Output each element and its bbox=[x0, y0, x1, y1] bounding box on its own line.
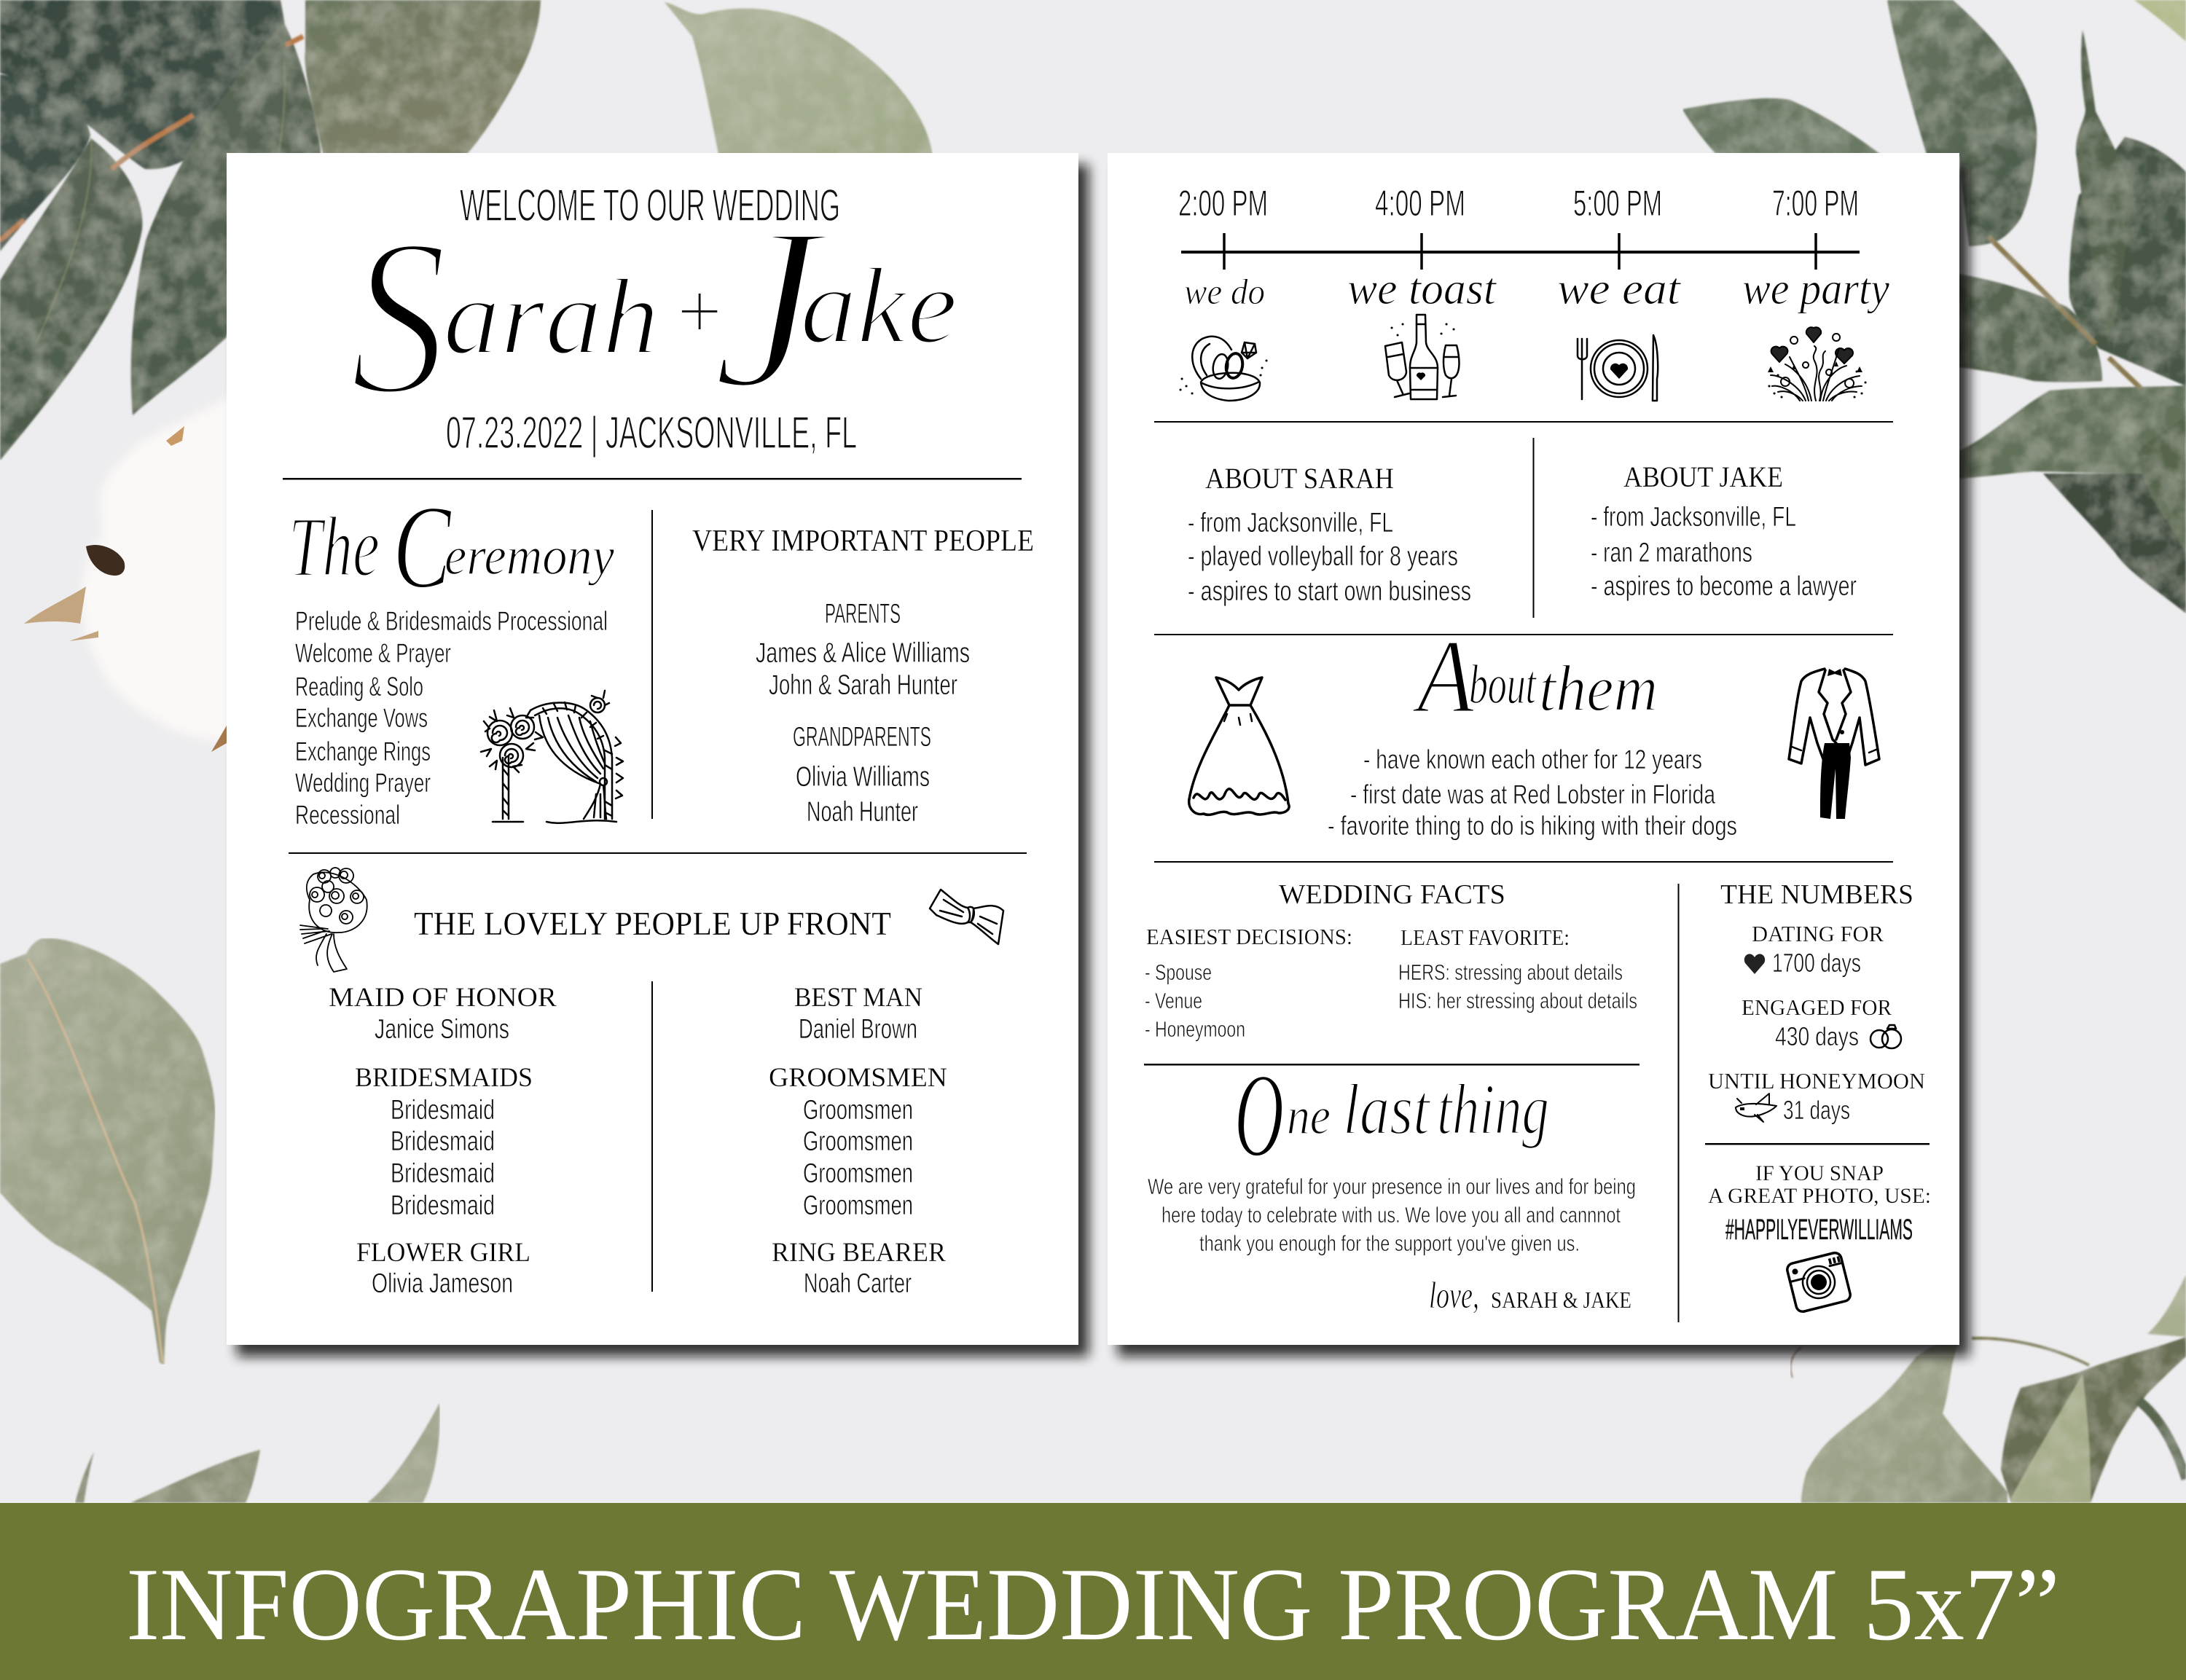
wedding party: groom side: GROOMSMEN bbox=[769, 1063, 947, 1093]
parents and grandparents list: John & Sarah Hunter bbox=[769, 670, 957, 701]
the numbers: THE NUMBERS bbox=[1720, 879, 1913, 910]
heading: about them: A bbox=[1412, 619, 1475, 735]
timeline: we do bbox=[1184, 271, 1265, 312]
about jake: - ran 2 marathons bbox=[1591, 538, 1752, 568]
heading: one last thing: thing bbox=[1437, 1069, 1549, 1150]
wedding facts: LEAST FAVORITE: bbox=[1400, 925, 1570, 950]
ceremony order list: Welcome & Prayer bbox=[295, 638, 451, 668]
heading: about them: them bbox=[1539, 653, 1658, 725]
wedding party: bride side: Olivia Jameson bbox=[372, 1268, 513, 1299]
wedding party: bride side: BRIDESMAIDS bbox=[355, 1063, 533, 1093]
heading: the ceremony: C bbox=[393, 480, 452, 613]
wedding party: bride side: Bridesmaid bbox=[391, 1158, 495, 1189]
title: couple names: + bbox=[676, 266, 723, 356]
title: couple names bbox=[350, 179, 957, 442]
photo hashtag prompt: IF YOU SNAP bbox=[1755, 1161, 1884, 1185]
the numbers: 430 days bbox=[1775, 1021, 1859, 1051]
wedding party: groom side: Noah Carter bbox=[804, 1268, 912, 1299]
wedding facts: HIS: her stressing about details bbox=[1398, 988, 1637, 1013]
heading: one last thing: O bbox=[1234, 1048, 1284, 1182]
icon: champagne and flutes bbox=[1385, 315, 1459, 399]
ceremony order list bbox=[295, 606, 608, 830]
the numbers: 31 days bbox=[1783, 1095, 1850, 1125]
ceremony order list: Wedding Prayer bbox=[295, 768, 431, 798]
title: couple names: S bbox=[350, 192, 447, 442]
wedding party: bride side: Janice Simons bbox=[375, 1014, 509, 1045]
signature: SARAH & JAKE bbox=[1491, 1287, 1631, 1313]
card shadows bbox=[237, 165, 1970, 1357]
thank you message: thank you enough for the support you've given us. bbox=[1199, 1230, 1580, 1256]
thank you message: We are very grateful for your presence in our lives and for being bbox=[1148, 1174, 1636, 1199]
about jake: ABOUT JAKE bbox=[1623, 460, 1783, 493]
wedding party: groom side: RING BEARER bbox=[772, 1238, 946, 1268]
eucalyptus leaves bottom bbox=[75, 1403, 440, 1503]
eucalyptus leaves top left bbox=[0, 0, 933, 460]
icon: ring box bbox=[1180, 337, 1266, 401]
ceremony order list: Recessional bbox=[295, 800, 400, 830]
wedding facts bbox=[1145, 879, 1637, 1042]
icon: small heart bbox=[1744, 954, 1765, 974]
about sarah: - from Jacksonville, FL bbox=[1188, 508, 1393, 538]
banner: product title: INFOGRAPHIC WEDDING PROGRAM 5x7” bbox=[126, 1547, 2060, 1662]
timeline: 2:00 PM bbox=[1178, 183, 1268, 224]
signature bbox=[1429, 1275, 1631, 1316]
thank you message bbox=[1148, 1174, 1636, 1256]
icon: small rings bbox=[1870, 1025, 1901, 1048]
timeline: 7:00 PM bbox=[1772, 183, 1859, 224]
eucalyptus leaves top right bbox=[1682, 0, 2186, 613]
thank you message: here today to celebrate with us. We love you all and cannnot bbox=[1161, 1202, 1621, 1228]
the numbers bbox=[1708, 879, 1925, 1125]
heading: about them: bout bbox=[1469, 654, 1537, 715]
the numbers: UNTIL HONEYMOON bbox=[1708, 1068, 1925, 1094]
photo hashtag prompt: #HAPPILYEVERWILLIAMS bbox=[1725, 1214, 1913, 1246]
heading: one last thing: ne bbox=[1287, 1087, 1331, 1145]
ceremony order list: Exchange Rings bbox=[295, 737, 431, 766]
eucalyptus leaves bottom right bbox=[1790, 1275, 2186, 1503]
about sarah: - aspires to start own business bbox=[1188, 576, 1471, 607]
heading: the ceremony: eremony bbox=[444, 527, 614, 586]
icon: camera bbox=[1786, 1252, 1852, 1313]
heading: the ceremony bbox=[289, 480, 614, 613]
about them facts: - have known each other for 12 years bbox=[1363, 745, 1702, 774]
divider: ceremony column bbox=[651, 510, 653, 819]
wedding party: groom side: Groomsmen bbox=[803, 1190, 913, 1221]
icon: floral wedding arch bbox=[481, 691, 623, 823]
heading: the lovely people up front: THE LOVELY PEOPLE UP FRONT bbox=[414, 906, 891, 942]
parents and grandparents list bbox=[756, 599, 970, 828]
icon: airplane bbox=[1736, 1094, 1776, 1122]
wedding party: groom side: BEST MAN bbox=[794, 983, 922, 1013]
signature: love, bbox=[1429, 1275, 1479, 1316]
ceremony order list: Reading & Solo bbox=[295, 672, 423, 702]
welcome line: WELCOME TO OUR WEDDING bbox=[460, 181, 840, 231]
panel: program back card bbox=[1108, 153, 1959, 1345]
wedding party: bride side: Bridesmaid bbox=[391, 1126, 495, 1157]
icon: tuxedo bbox=[1789, 669, 1879, 819]
about jake: - from Jacksonville, FL bbox=[1591, 502, 1796, 533]
the numbers: DATING FOR bbox=[1752, 921, 1884, 946]
timeline: we toast bbox=[1347, 264, 1497, 314]
photo hashtag prompt: A GREAT PHOTO, USE: bbox=[1708, 1184, 1931, 1208]
wedding party: bride side: FLOWER GIRL bbox=[356, 1238, 530, 1268]
wedding party: groom side bbox=[769, 983, 947, 1299]
timeline bbox=[1178, 183, 1889, 314]
timeline: we party bbox=[1742, 264, 1889, 314]
wedding facts: - Honeymoon bbox=[1145, 1016, 1245, 1042]
heading: about them bbox=[1412, 619, 1658, 735]
icon: bow tie bbox=[930, 890, 1003, 944]
about them facts bbox=[1328, 745, 1737, 841]
timeline: we eat bbox=[1557, 264, 1682, 314]
the numbers: ENGAGED FOR bbox=[1742, 994, 1892, 1020]
title: couple names: arah bbox=[443, 256, 659, 377]
wedding party: groom side: Groomsmen bbox=[803, 1095, 913, 1126]
wedding facts: - Spouse bbox=[1145, 959, 1212, 985]
cotton boll bbox=[24, 393, 237, 752]
about them facts: - favorite thing to do is hiking with their dogs bbox=[1328, 811, 1737, 841]
photo hashtag prompt bbox=[1708, 1161, 1931, 1246]
heading: the ceremony: The bbox=[289, 499, 380, 594]
wedding party: bride side: Bridesmaid bbox=[391, 1095, 495, 1126]
wedding party: bride side: MAID OF HONOR bbox=[329, 983, 557, 1013]
icon: bouquet bbox=[300, 868, 367, 972]
title: couple names: J bbox=[712, 179, 831, 437]
wedding facts: WEDDING FACTS bbox=[1279, 879, 1505, 910]
timeline: 5:00 PM bbox=[1573, 183, 1662, 224]
parents and grandparents list: PARENTS bbox=[825, 599, 901, 629]
panel: program front card bbox=[227, 153, 1078, 1345]
wedding facts: HERS: stressing about details bbox=[1398, 959, 1623, 985]
about sarah: - played volleyball for 8 years bbox=[1188, 541, 1458, 572]
parents and grandparents list: Olivia Williams bbox=[796, 761, 930, 793]
the numbers: 1700 days bbox=[1772, 948, 1861, 978]
wedding facts: - Venue bbox=[1145, 988, 1202, 1013]
about sarah bbox=[1188, 462, 1471, 607]
about sarah: ABOUT SARAH bbox=[1205, 462, 1394, 495]
wedding party: groom side: Daniel Brown bbox=[799, 1014, 917, 1045]
icon: plate and cutlery bbox=[1578, 335, 1658, 401]
wedding party: bride side bbox=[329, 983, 557, 1299]
banner: product title bbox=[0, 1503, 2186, 1680]
icon: fireworks and hearts bbox=[1768, 327, 1865, 401]
ceremony order list: Exchange Vows bbox=[295, 703, 428, 733]
wedding party: groom side: Groomsmen bbox=[803, 1158, 913, 1189]
about jake: - aspires to become a lawyer bbox=[1591, 571, 1857, 602]
date and location: 07.23.2022 | JACKSONVILLE, FL bbox=[446, 408, 857, 458]
wedding party: bride side: Bridesmaid bbox=[391, 1190, 495, 1221]
title: couple names: ake bbox=[800, 246, 957, 366]
wedding facts: EASIEST DECISIONS: bbox=[1146, 924, 1352, 949]
heading: very important people: VERY IMPORTANT PEOPLE bbox=[692, 525, 1034, 558]
parents and grandparents list: James & Alice Williams bbox=[756, 637, 970, 669]
wedding party: groom side: Groomsmen bbox=[803, 1126, 913, 1157]
timeline: 4:00 PM bbox=[1375, 183, 1465, 224]
icon: wedding dress bbox=[1189, 678, 1289, 815]
ceremony order list: Prelude & Bridesmaids Processional bbox=[295, 606, 608, 636]
about them facts: - first date was at Red Lobster in Florida bbox=[1350, 780, 1715, 809]
eucalyptus leaf left bbox=[0, 938, 215, 1365]
parents and grandparents list: GRANDPARENTS bbox=[793, 722, 931, 753]
heading: one last thing bbox=[1234, 1048, 1549, 1182]
parents and grandparents list: Noah Hunter bbox=[807, 796, 918, 828]
about jake bbox=[1591, 460, 1857, 602]
heading: one last thing: last bbox=[1343, 1069, 1431, 1150]
